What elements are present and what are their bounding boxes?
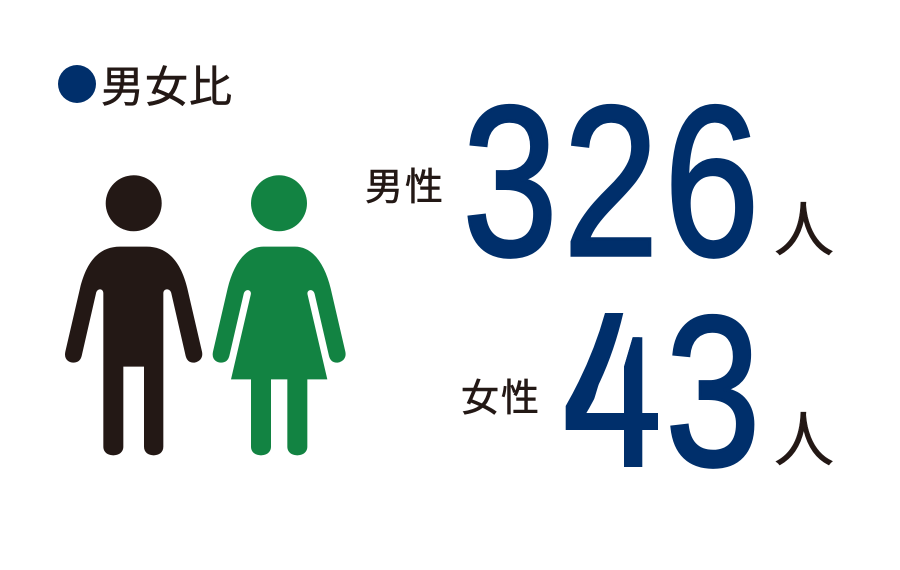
number: female count 43: 3: [665, 273, 766, 511]
unit: people (female): 人: [774, 392, 834, 479]
number: female count 43: 4: [564, 273, 665, 511]
unit: people (male): 人: [774, 182, 834, 269]
number: male count 326: 326: [462, 63, 765, 301]
label: female: 女性: [461, 367, 541, 422]
number: female count 43: [555, 273, 766, 511]
label: male: 男性: [365, 156, 445, 211]
heading: gender ratio: 男女比: [101, 53, 233, 115]
icon: woman: [213, 175, 346, 455]
icon: man: [65, 175, 202, 455]
